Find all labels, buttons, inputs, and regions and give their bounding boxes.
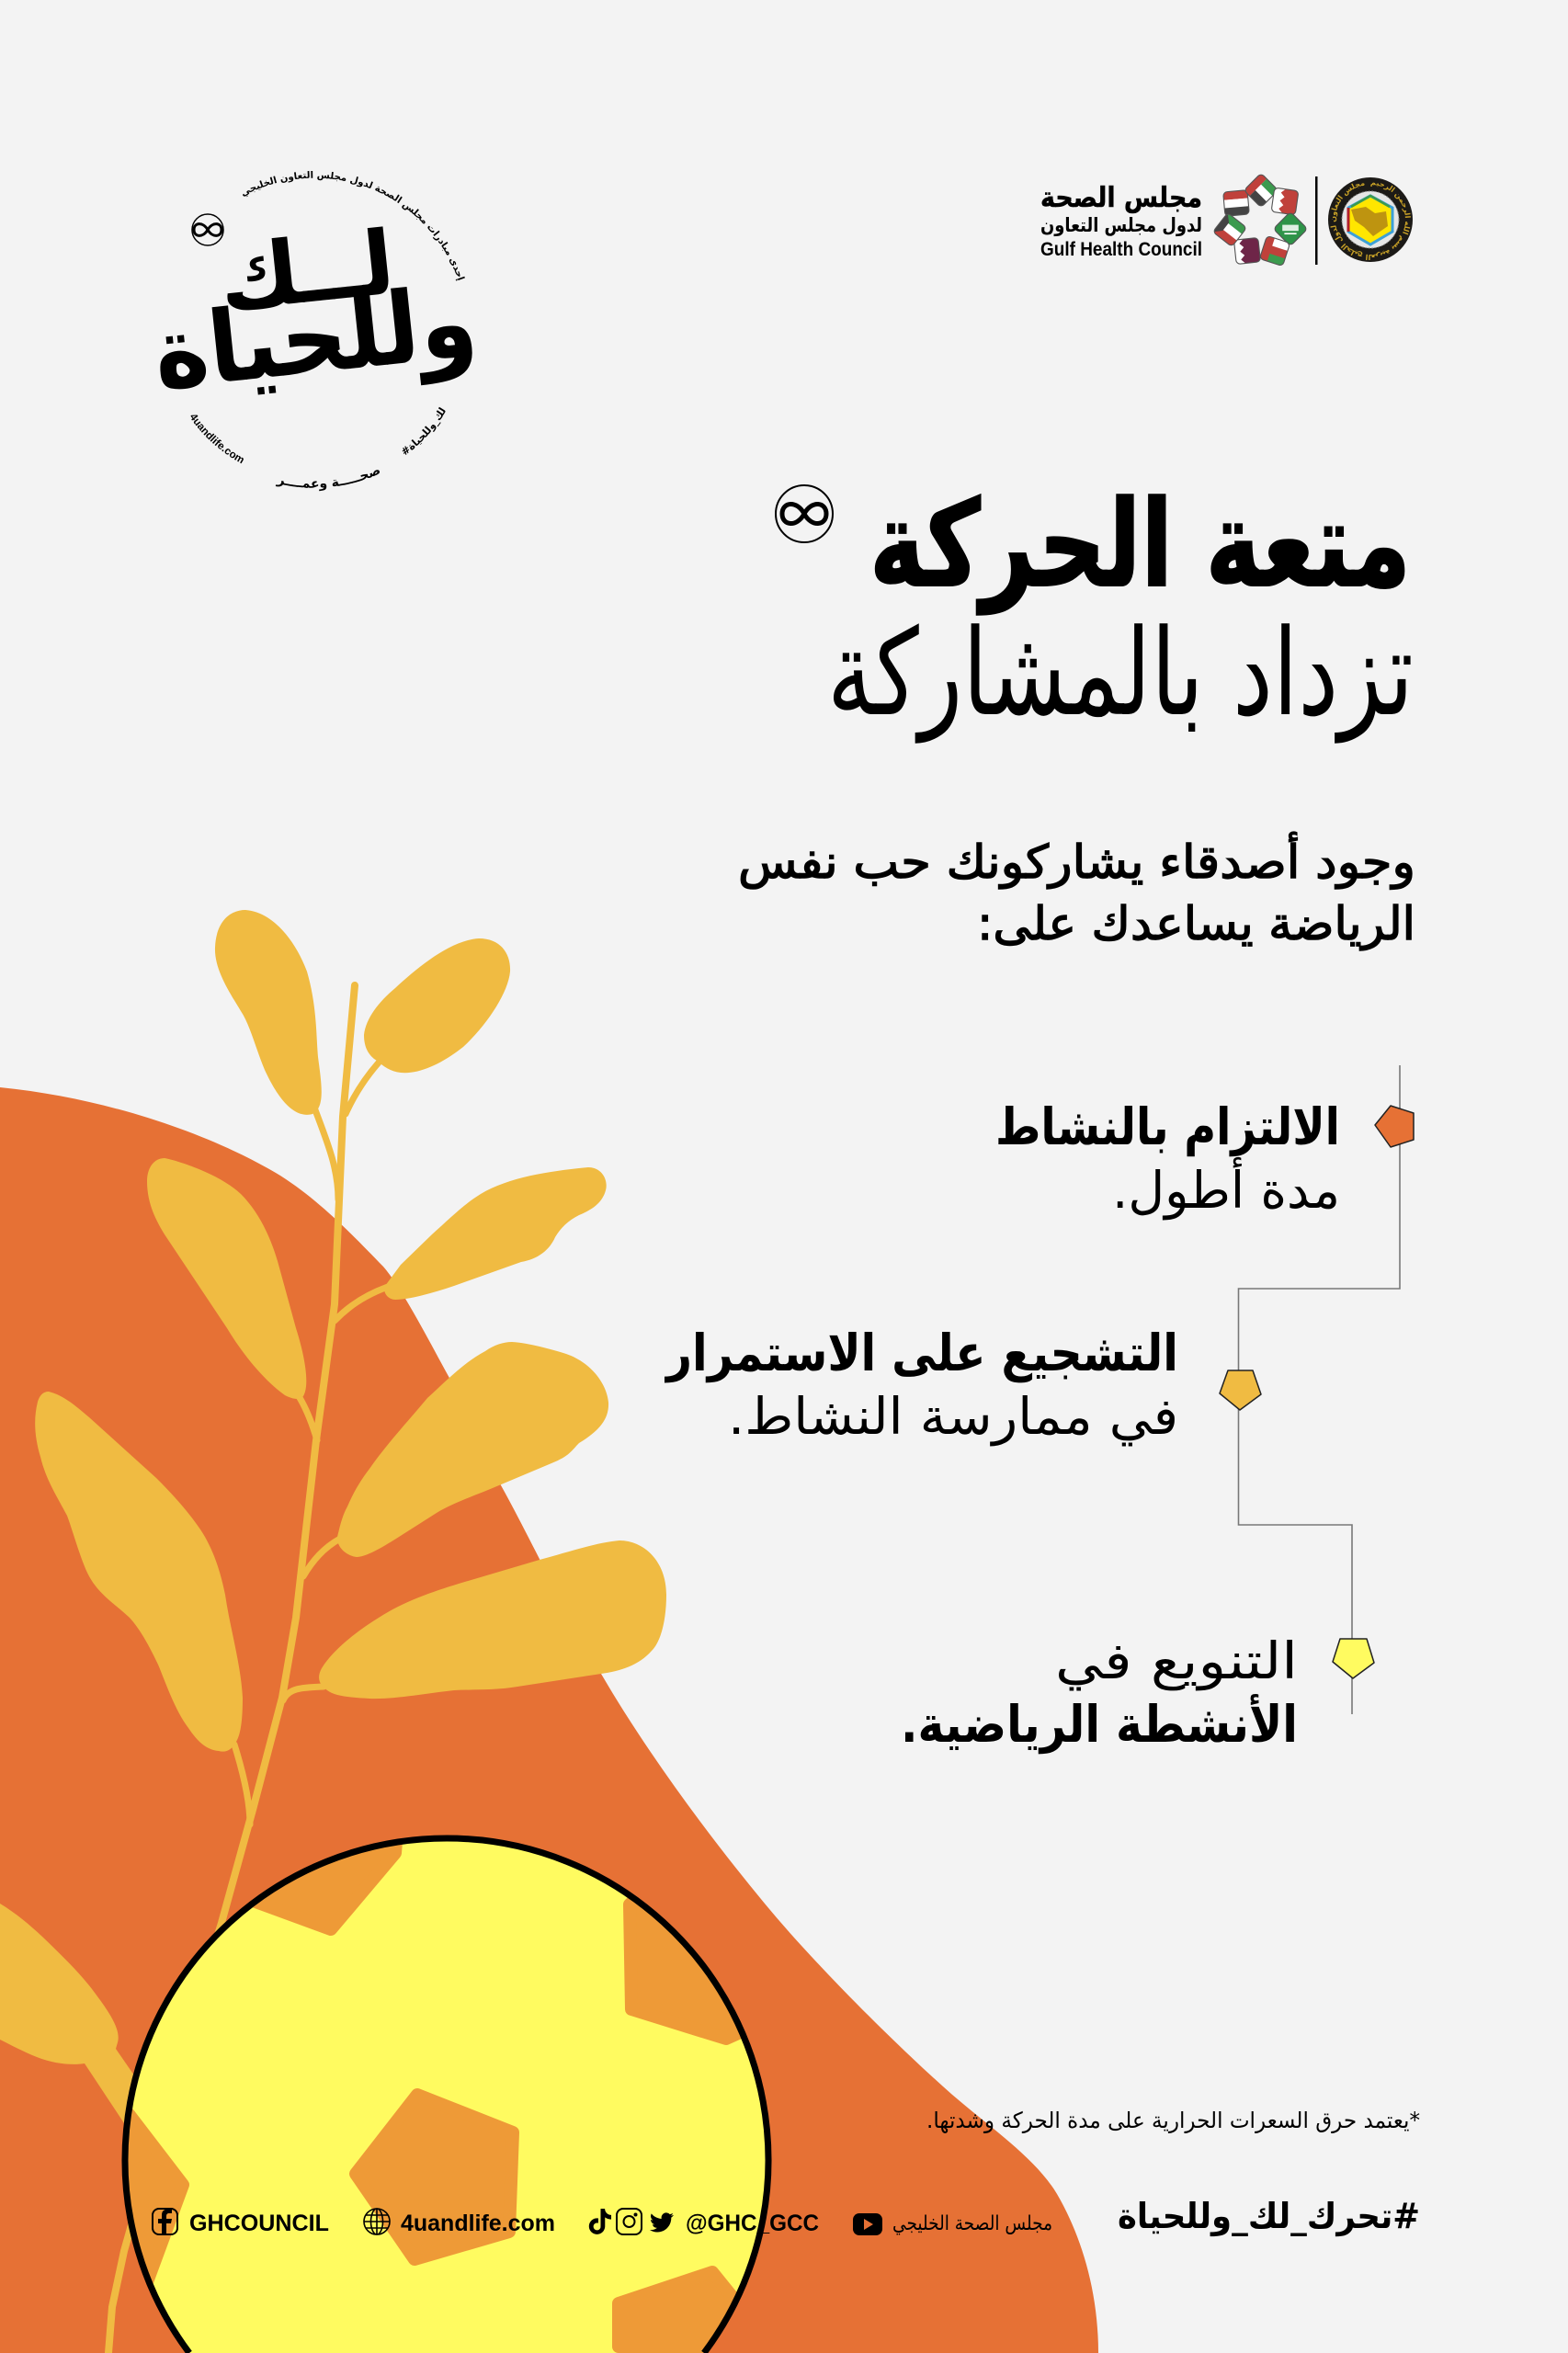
leaf 2 <box>364 938 510 1073</box>
youtube <box>853 2212 1052 2235</box>
benefits timeline <box>664 1065 1414 1754</box>
plant illustration <box>0 910 666 2353</box>
flag ring <box>1212 173 1308 267</box>
logo wordmark: مجلس الصحة <box>1040 182 1202 214</box>
ball pentagons <box>129 1829 763 2347</box>
twitter, instagram, tiktok handle: @GHC_GCC <box>686 2211 819 2236</box>
marker 2 <box>1220 1370 1261 1410</box>
footnote: *يعتمد حرق السعرات الحرارية على مدة الحركة وشدتها. <box>926 2108 1420 2133</box>
benefit 2: التشجيع على الاستمرار <box>664 1324 1178 1382</box>
youtube: مجلس الصحة الخليجي <box>892 2212 1052 2235</box>
orange blob <box>0 1087 1098 2353</box>
logo divider <box>1315 176 1318 265</box>
benefit 1 <box>995 1097 1340 1220</box>
campaign logo <box>148 171 483 491</box>
benefit 1: مدة أطول. <box>1112 1157 1340 1220</box>
leaf 8 <box>0 1904 161 2123</box>
wordmark: for you and for life: لــك <box>214 211 400 332</box>
connector line <box>1239 1065 1400 1714</box>
intro paragraph: وجود أصدقاء يشاركونك حب نفس <box>738 832 1415 890</box>
header: Gulf Health Council logo <box>1040 175 1413 266</box>
benefit 1: الالتزام بالنشاط <box>995 1097 1340 1157</box>
leaf 6 <box>319 1540 666 1699</box>
social links <box>153 2209 1052 2236</box>
leaf 7 <box>35 1392 243 1752</box>
leaf 1 <box>215 910 322 1115</box>
ring text: health and life: صحـــــة وعمــــر <box>276 470 381 491</box>
title line 1: متعة الحركة <box>869 474 1411 615</box>
intro paragraph: الرياضة يساعدك على: <box>977 897 1415 950</box>
benefit 2 <box>664 1324 1178 1447</box>
website: 4uandlife.com <box>401 2211 555 2236</box>
ring text: initiative: إحدى مبادرات مجلس الصحة لدول مجلس التعاون الخليجي <box>243 171 465 281</box>
leaf 5 <box>337 1342 608 1557</box>
GCC emblem: مجلس التعاون لدول الخليج العربية بسم الله الرحمن الرحيم <box>1331 182 1411 260</box>
twitter, instagram, tiktok handle <box>589 2209 819 2236</box>
soccer ball <box>125 1829 768 2353</box>
benefit 3 <box>901 1631 1298 1754</box>
infinity badge small <box>192 214 223 245</box>
benefit 3: التنويع في <box>1055 1631 1298 1691</box>
ball fill <box>125 1838 768 2353</box>
wordmark: for you and for life <box>142 203 483 414</box>
wordmark: for you and for life: وللحياة <box>148 265 483 414</box>
leaf 4 <box>384 1167 607 1300</box>
ball outline <box>125 1838 768 2353</box>
hashtag: #تحرك_لك_وللحياة <box>1118 2196 1420 2237</box>
marker 1 <box>1375 1106 1414 1147</box>
benefit 3: الأنشطة الرياضية. <box>901 1694 1298 1754</box>
plant stems <box>108 985 388 2353</box>
intro paragraph <box>738 832 1415 950</box>
logo wordmark <box>1040 182 1202 260</box>
benefit 2: في ممارسة النشاط. <box>728 1387 1178 1447</box>
infinity badge <box>776 485 833 542</box>
logo wordmark: Gulf Health Council <box>1040 239 1202 260</box>
leaf 3 <box>147 1158 306 1399</box>
logo wordmark: لدول مجلس التعاون <box>1040 214 1202 236</box>
facebook: GHCOUNCIL <box>189 2211 329 2236</box>
ring text: website: 4uandlife.com <box>191 415 244 463</box>
title <box>776 474 1414 744</box>
marker 3 <box>1333 1639 1374 1678</box>
ring text: hashtag: #لك_وللحياة <box>403 406 445 455</box>
